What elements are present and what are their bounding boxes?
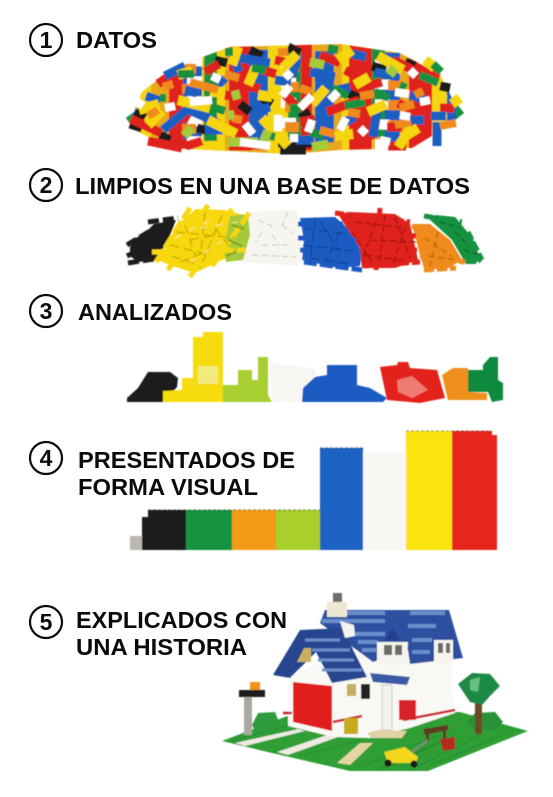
green base plate [222, 712, 528, 771]
tree [458, 673, 500, 734]
gable wall window [297, 648, 311, 662]
section 2: clean in database [30, 169, 482, 277]
red highlight [397, 376, 428, 398]
black stack [127, 372, 178, 402]
heading: presentados de forma visual: PRESENTADOS DE [78, 447, 295, 473]
heading: analizados: ANALIZADOS [78, 299, 232, 325]
satellite dish [340, 621, 355, 638]
section 4: visual presentation [30, 431, 497, 550]
house walls [288, 640, 455, 738]
image: bricks sorted by colour [127, 205, 482, 277]
badge 3 [30, 295, 62, 327]
lime bricks [224, 214, 250, 262]
bar: lime [276, 510, 320, 550]
badge 5: 5 [40, 609, 53, 635]
image: bricks stacked by colour [127, 332, 503, 403]
badge 2: 2 [40, 172, 52, 198]
badge 4: 4 [40, 445, 53, 471]
window [347, 684, 356, 696]
flower pot [344, 718, 358, 734]
bar: red [452, 431, 497, 550]
badge 1: 1 [40, 27, 53, 53]
bar: black [142, 510, 186, 550]
plate stud lines [232, 722, 515, 770]
porch step [367, 730, 407, 738]
heading: presentados de forma visual [78, 447, 295, 500]
blue stack [302, 365, 387, 402]
green stacks [468, 357, 503, 402]
porch roof [370, 673, 410, 685]
red post box [399, 700, 416, 720]
red bricks [338, 212, 418, 268]
badge 2 [30, 169, 62, 201]
dormers [377, 628, 453, 665]
yellow stack [163, 332, 230, 402]
section 1: raw data [30, 24, 470, 158]
orange bricks [412, 224, 462, 270]
white bricks [240, 210, 302, 266]
red stack [380, 362, 445, 403]
heading: explicados con una historia: EXPLICADOS CON [76, 607, 287, 633]
image: brick house [222, 593, 528, 771]
badge 4 [30, 442, 62, 474]
driveway [235, 729, 338, 755]
bar studs [148, 431, 492, 510]
yellow highlight [198, 366, 218, 384]
red wall stripe [283, 710, 455, 722]
lantern [361, 684, 370, 699]
white stack [270, 362, 316, 402]
heading: explicados con una historia [76, 607, 287, 660]
badge 5 [30, 606, 62, 638]
heading: limpios en una base de datos: LIMPIOS EN UNA BASE DE DATOS [75, 173, 470, 199]
green bricks [428, 215, 479, 264]
badge 3: 3 [40, 298, 52, 324]
lawn mower [384, 740, 428, 768]
badge 1 [30, 24, 62, 56]
roof light stripes [322, 613, 445, 652]
bar: yellow [406, 431, 452, 550]
garage gable roof [273, 628, 367, 683]
heading: datos: DATOS [76, 27, 157, 53]
bar: grey stub [130, 536, 142, 550]
gable roof light stripes [305, 640, 362, 670]
bar: orange [232, 510, 276, 550]
left bush [252, 712, 279, 733]
mailbox [239, 682, 265, 735]
bar: green [186, 510, 232, 550]
heading: presentados de forma visual: FORMA VISUAL [78, 474, 258, 500]
garage door [293, 682, 332, 731]
bar: blue [320, 448, 363, 550]
image: pile of mixed bricks [120, 40, 470, 158]
door [382, 685, 392, 730]
section 5: told with a story [30, 593, 528, 771]
brick texture [127, 205, 482, 277]
garden path [337, 743, 373, 765]
yellow bricks [158, 209, 248, 273]
chimney [327, 593, 347, 617]
main roof [320, 610, 463, 664]
bar chart made of bricks [130, 431, 497, 550]
bench [423, 725, 448, 742]
right bush [467, 712, 503, 730]
section 3: analysed [30, 295, 503, 403]
heading: explicados con una historia: UNA HISTORIA [76, 634, 247, 660]
red bucket [440, 737, 455, 751]
lime stack [223, 357, 272, 402]
blue bricks [300, 217, 362, 268]
orange stack [442, 368, 487, 400]
bar: white [363, 452, 406, 550]
black bricks [130, 220, 176, 262]
